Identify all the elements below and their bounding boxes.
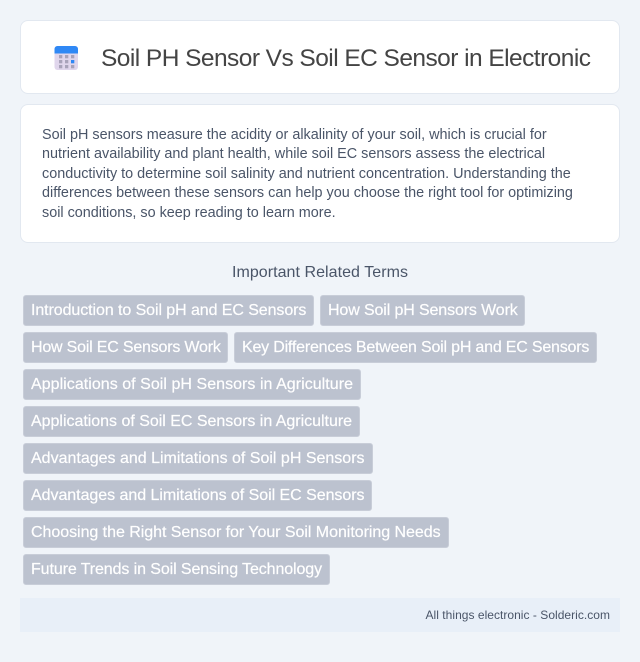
tag: How Soil pH Sensors Work [328, 302, 518, 319]
tag [23, 406, 360, 437]
tag [23, 332, 228, 363]
tag [23, 517, 449, 548]
tag: Choosing the Right Sensor for Your Soil Monitoring Needs [31, 524, 441, 541]
tag [23, 554, 330, 585]
tag: Key Differences Between Soil pH and EC Sensors [242, 339, 589, 356]
tag: Advantages and Limitations of Soil pH Sensors [31, 450, 365, 467]
text block: description: conductivity to determine soil salinity and nutrient concentration. Understanding the [42, 166, 571, 182]
text block: description: Soil pH sensors measure the acidity or alkalinity of your soil, which is crucial for [42, 127, 547, 143]
icon: calendar [54, 46, 78, 70]
footer [20, 598, 620, 632]
panel: header card [20, 20, 620, 94]
tag: Introduction to Soil pH and EC Sensors [31, 302, 306, 319]
tag: Applications of Soil EC Sensors in Agriculture [31, 413, 352, 430]
text block: description: differences between these sensors can help you choose the right tool for optimizing [42, 185, 573, 201]
tag [234, 332, 597, 363]
text block: description: nutrient availability and plant health, while soil EC sensors assess the electrical [42, 146, 545, 162]
tag: Advantages and Limitations of Soil EC Sensors [31, 487, 364, 504]
text block: description [42, 127, 573, 221]
panel: description [20, 104, 620, 243]
tag: Future Trends in Soil Sensing Technology [31, 561, 322, 578]
tag: Applications of Soil pH Sensors in Agriculture [31, 376, 353, 393]
footer text: All things electronic - Solderic.com [426, 608, 610, 622]
tag [23, 295, 314, 326]
tag [23, 369, 361, 400]
tag [23, 480, 372, 511]
tag [23, 443, 373, 474]
tag list [23, 295, 597, 585]
tag: How Soil EC Sensors Work [31, 339, 221, 356]
tag [320, 295, 525, 326]
title: Soil PH Sensor Vs Soil EC Sensor in Electronic [101, 45, 590, 72]
text block: description: soil conditions, so keep reading to learn more. [42, 205, 336, 221]
heading: related terms: Important Related Terms [232, 264, 408, 281]
